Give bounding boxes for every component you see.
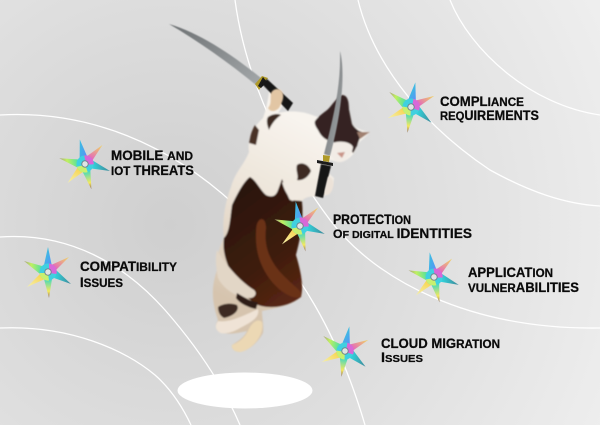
item: cloud migration issues [317, 322, 500, 381]
tail [256, 219, 301, 298]
label [468, 265, 579, 295]
item: mobile and IoT threats [56, 135, 194, 194]
dark rear spot [218, 304, 238, 318]
icon: shuriken [272, 197, 327, 256]
holding paw [325, 177, 333, 195]
icon: shuriken [317, 322, 372, 381]
label: MOBILE AND [111, 148, 193, 163]
label: ISSUES [381, 350, 423, 365]
label: ISSUES [80, 275, 123, 290]
cat with two swords [169, 24, 370, 352]
icon: shuriken [56, 135, 113, 194]
label: IOT THREATS [111, 163, 194, 178]
raised sword handle [262, 79, 293, 111]
brown patch: back [223, 177, 303, 307]
sword: raised blade [169, 24, 268, 90]
label [440, 94, 539, 123]
paws [216, 309, 258, 333]
icon: shuriken [406, 248, 461, 307]
label: COMPLIANCE [440, 94, 524, 109]
cat body [213, 88, 370, 352]
label: CLOUD MIGRATION [381, 336, 500, 351]
cat head markings [315, 95, 362, 153]
item: application vulnerabilities [406, 248, 579, 307]
label: COMPATIBILITY [80, 259, 177, 274]
raised paw [268, 89, 283, 111]
label: PROTECTION [333, 212, 411, 227]
label: OF DIGITAL IDENTITIES [333, 226, 472, 241]
label: VULNERABILITIES [468, 280, 579, 295]
white belly band [216, 250, 256, 298]
label [333, 212, 472, 241]
item: compliance requirements [383, 78, 539, 137]
icon: shuriken [24, 247, 71, 298]
icon: shuriken [383, 78, 438, 137]
white arm across chest [282, 178, 322, 201]
item: protection of digital identities [272, 197, 472, 256]
label [381, 336, 500, 365]
sword: upright blade [315, 51, 343, 198]
label: APPLICATION [468, 265, 553, 280]
item: compatibility issues [24, 247, 177, 298]
body silhouette [213, 88, 370, 352]
dark back spots [296, 163, 311, 180]
label: REQUIREMENTS [440, 108, 539, 123]
label [80, 259, 177, 290]
white ellipse shadow [178, 372, 312, 408]
label [111, 148, 194, 178]
